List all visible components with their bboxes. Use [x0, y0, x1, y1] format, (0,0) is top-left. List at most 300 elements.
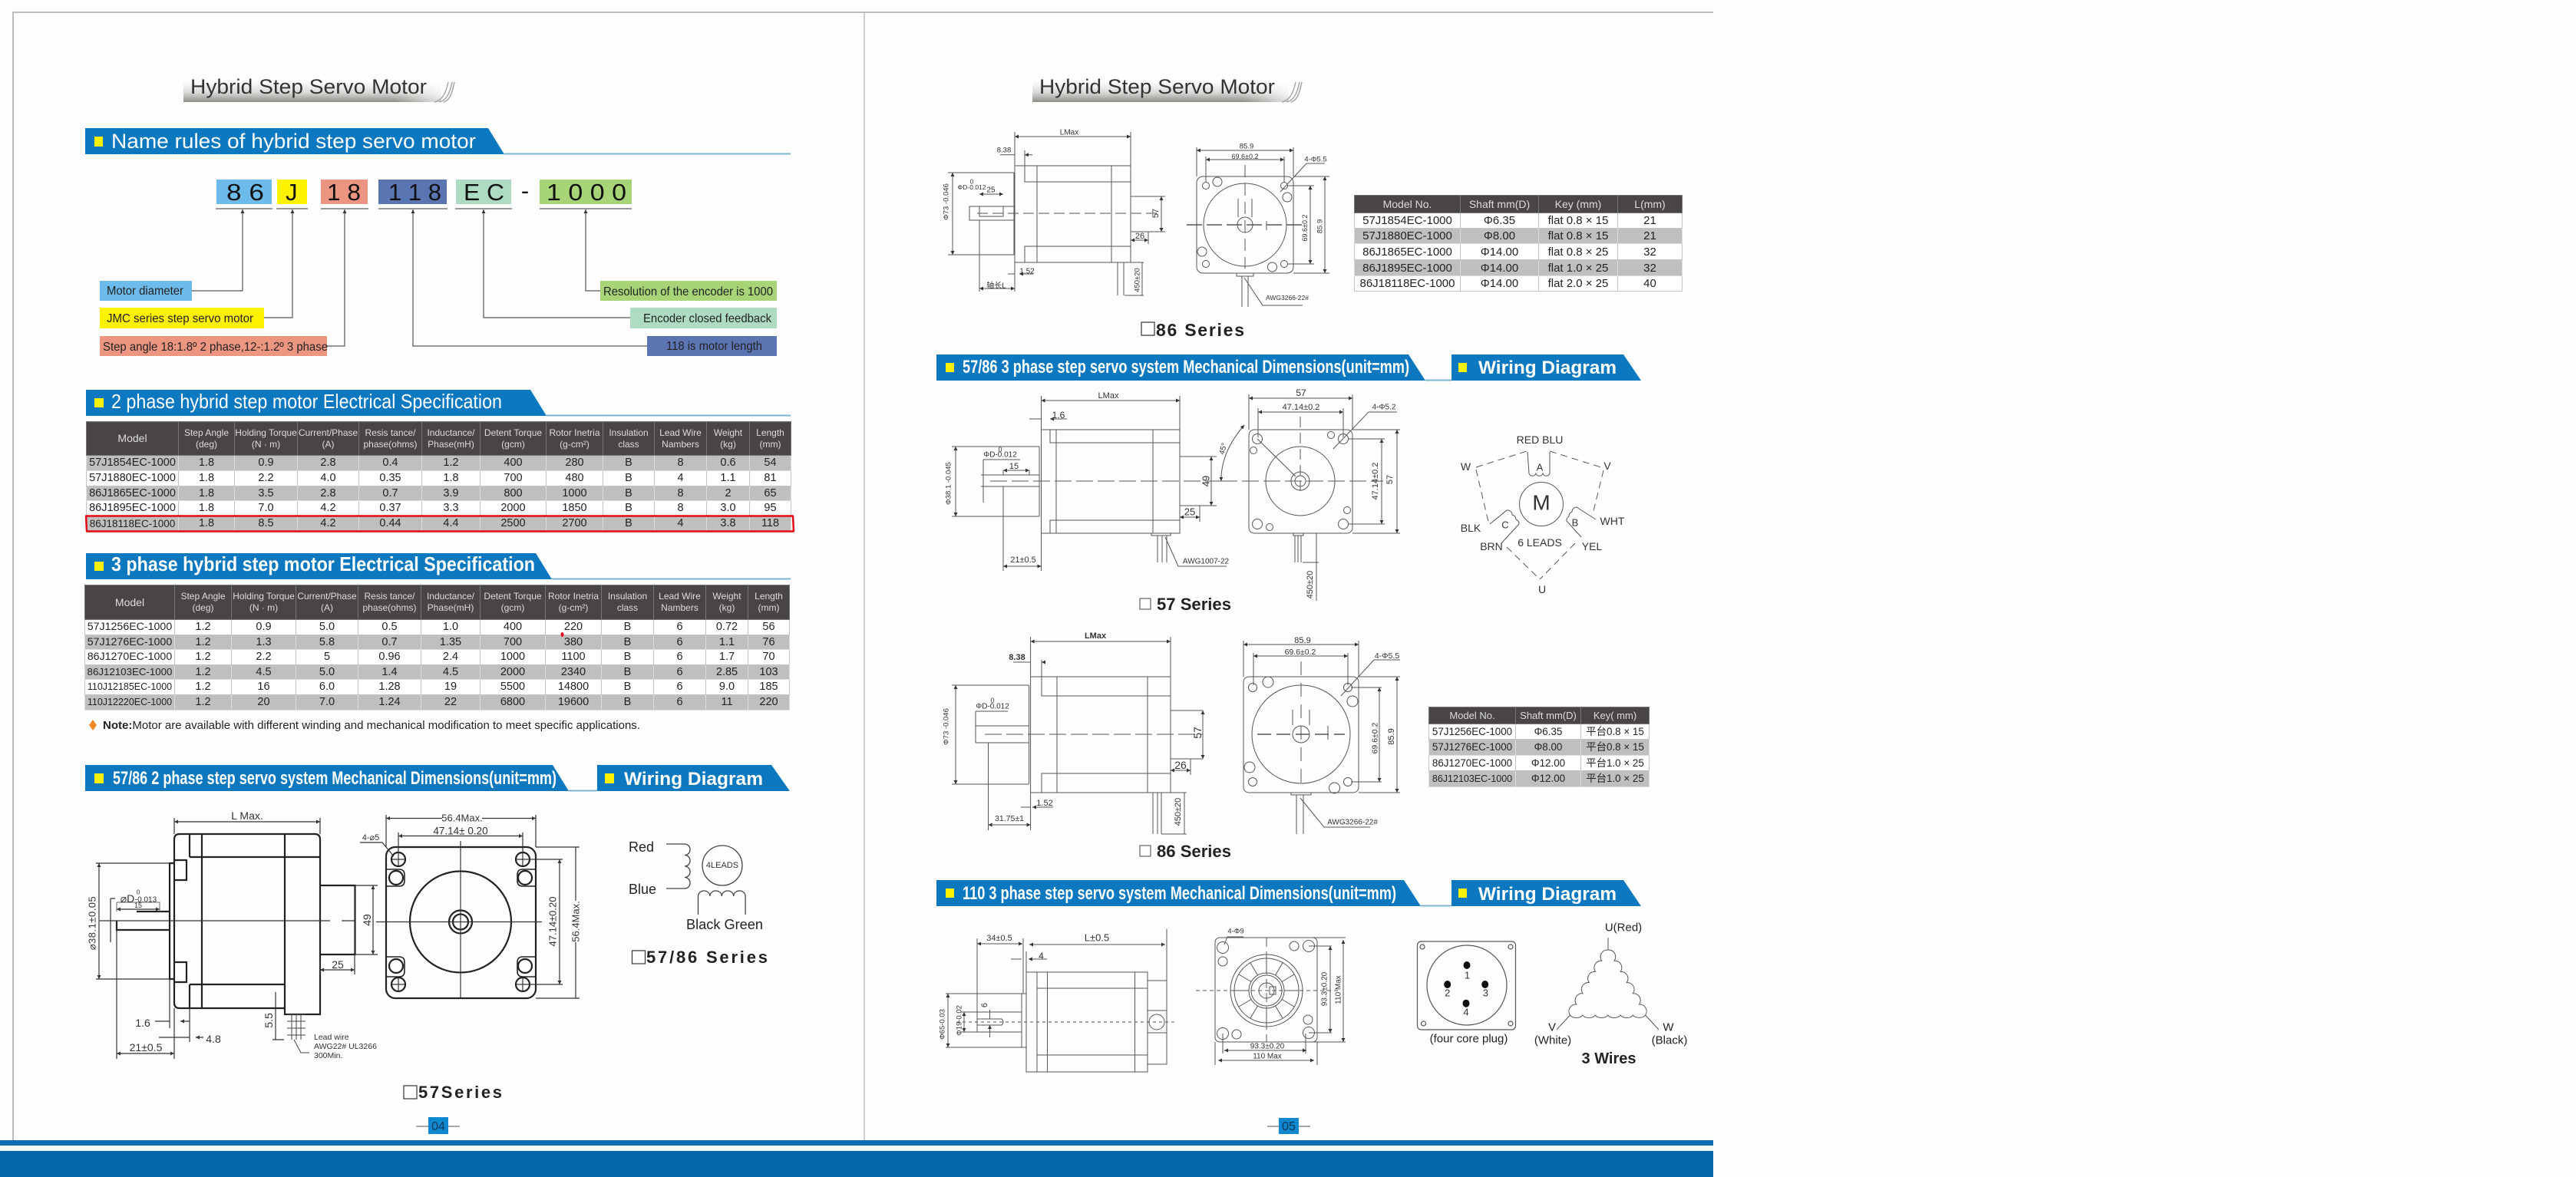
code segment: 18: 1 8: [327, 179, 361, 206]
table: 2 phase electrical specification: (gcm): [501, 439, 525, 450]
table: 2 phase electrical specification: 1850: [562, 502, 587, 514]
drawing: 57 series 3 phase front view: 47.14±0.2: [1371, 463, 1380, 499]
label: step angle: Step angle 18:1.8º 2 phase,12-:1.2º 3 phase: [103, 341, 328, 354]
drawing: 86 series 2 phase side view: ΦD-0.012: [957, 183, 986, 191]
table: 2 phase electrical specification: 86J18118EC-1000: [90, 518, 175, 529]
table: 3 phase electrical specification: class: [617, 602, 638, 613]
table: 2 phase electrical specification: 480: [565, 472, 584, 484]
wiring: 6 leads: U: [1538, 583, 1546, 595]
wiring: 3 wires delta: U(Red): [1605, 921, 1642, 935]
drawing: 57 series 3 phase side view: ΦD-0.012: [983, 451, 1017, 459]
table: 2 phase electrical specification: 65: [764, 487, 777, 499]
table: 86 series shaft dimensions: flat 0.8 × 25: [1548, 246, 1608, 258]
drawing: 57 series side view: L Max.: [231, 809, 263, 822]
drawing: 86 series 3 phase side view: 1.52: [1036, 799, 1053, 808]
table: 2 phase electrical specification: 2500: [500, 517, 526, 529]
table: 2 phase electrical specification: 95: [764, 502, 777, 514]
table: 2 phase electrical specification: 8: [677, 487, 684, 499]
label: resolution of encoder: [600, 281, 777, 301]
page number 04: 04: [431, 1120, 445, 1133]
drawing: 86 series 3 phase side view: 450±20: [1174, 798, 1183, 826]
table: 3 phase electrical specification: Step Angle: [180, 591, 226, 602]
wiring: 6 leads: M: [1532, 491, 1551, 514]
table: 3 phase electrical specification: Nambers: [661, 602, 698, 613]
table: 3 phase electrical specification: Phase(mH): [428, 602, 474, 613]
table: 3 phase electrical specification: Current/Phase: [297, 591, 357, 602]
drawing: 86 series 2 phase side view: 1.52: [1019, 267, 1035, 276]
drawing: 110 series front view: 93.3±0.20: [1320, 971, 1329, 1006]
table: 2 phase electrical specification: 1.8: [199, 472, 214, 484]
drawing: 110 series side view: 34±0.5: [986, 934, 1012, 943]
table: 2 phase electrical specification: 0.4: [382, 457, 398, 469]
table: 2 phase electrical specification: 1.8: [199, 502, 214, 514]
table: 3 phase electrical specification: 57J1256EC-1000: [88, 621, 172, 633]
table: 3 phase electrical specification: 2.2: [256, 651, 272, 663]
table: 2 phase electrical specification: 700: [504, 472, 523, 484]
table: 2 phase electrical specification: Nambers: [662, 439, 699, 450]
label: JMC series: [100, 308, 264, 328]
label: step angle: [100, 336, 328, 356]
table: 3 phase electrical specification: 1.35: [440, 636, 461, 648]
table: 2 phase electrical specification: 4: [677, 472, 684, 484]
table: 2 phase electrical specification: 2.2: [258, 472, 274, 484]
drawing: 57 series side view: [86, 809, 378, 1060]
table: 86 series shaft dimensions: Φ8.00: [1484, 229, 1515, 242]
model code breakdown: [216, 177, 632, 209]
table: 3 phase electrical specification: (deg): [192, 602, 213, 613]
table: 2 phase electrical specification: 2700: [562, 517, 587, 529]
drawing: 86 series 2 phase side view: 26: [1135, 232, 1144, 241]
table: 3 phase electrical specification: 7.0: [319, 696, 335, 708]
table: 3 phase electrical specification: 1.2: [195, 681, 211, 693]
table: 3 phase shaft dimensions: Φ6.35: [1534, 726, 1562, 737]
table: 3 phase electrical specification: (g-cm²): [559, 602, 588, 613]
wiring: 6 leads: C: [1501, 519, 1509, 531]
table: 2 phase electrical specification: 8.5: [258, 517, 274, 529]
drawing: 86 series 2 phase side view: 0: [970, 178, 974, 186]
drawing: 86 series 2 phase front view: 69.6±0.2: [1301, 215, 1309, 241]
table: 3 phase electrical specification: 1.24: [378, 696, 401, 708]
table: 3 phase electrical specification: 0.7: [381, 636, 398, 648]
table: 2 phase electrical specification: 7.0: [258, 502, 274, 514]
table: 3 phase electrical specification: 110J12185EC-1000: [88, 681, 172, 692]
table: 3 phase electrical specification: (N · m): [249, 602, 278, 613]
table: 3 phase electrical specification: 1.0: [443, 621, 458, 633]
drawing: 86 series 3 phase front view: AWG3266-22#: [1327, 818, 1378, 827]
table: 2 phase electrical specification: Rotor Inetria: [549, 427, 600, 437]
table: 86 series shaft dimensions: [1354, 195, 1683, 292]
wiring: 3 wires delta: [1534, 921, 1687, 1067]
connector: four core plug: 4: [1463, 1007, 1469, 1017]
drawing: 86 series 2 phase side view: Φ73 -0.046: [943, 183, 950, 220]
wiring: 4 leads: 4LEADS: [706, 861, 738, 870]
connector: four core plug: 1: [1465, 970, 1470, 981]
table: 3 phase electrical specification: 220: [564, 621, 583, 633]
table: 3 phase electrical specification: B: [624, 666, 631, 678]
table: 86 series shaft dimensions: Shaft mm(D): [1469, 198, 1530, 210]
label: motor length: 118 is motor length: [666, 340, 762, 353]
table: 2 phase electrical specification: 2: [725, 487, 732, 499]
table: 3 phase shaft dimensions: 57J1256EC-1000: [1432, 726, 1512, 737]
table: 2 phase electrical specification: 3.8: [720, 517, 736, 529]
connector: four core plug: [1417, 941, 1515, 1045]
table: 3 phase electrical specification: 57J1276EC-1000: [88, 636, 172, 648]
table: 3 phase shaft dimensions: Φ12.00: [1531, 773, 1565, 784]
drawing: 110 series front view: 110 Max: [1253, 1053, 1282, 1060]
table: 3 phase electrical specification: B: [624, 651, 631, 663]
table: 2 phase electrical specification: B: [625, 487, 632, 499]
table: 86 series shaft dimensions: Model No.: [1383, 198, 1432, 210]
drawing: 57 series 3 phase side view: 1.6: [1052, 410, 1065, 420]
table: 2 phase electrical specification: [86, 421, 791, 532]
table: 2 phase electrical specification: 1.8: [199, 487, 214, 499]
table: 3 phase electrical specification: (A): [321, 602, 333, 613]
table: 3 phase electrical specification: 19: [444, 681, 457, 693]
drawing: 57 series 3 phase front view: 450±20: [1306, 571, 1315, 598]
table: 3 phase electrical specification: 6: [676, 666, 683, 678]
table: 86 series shaft dimensions: flat 2.0 × 25: [1548, 277, 1608, 290]
table: 3 phase shaft dimensions: 57J1276EC-1000: [1432, 741, 1512, 753]
table: 86 series shaft dimensions: 21: [1643, 214, 1656, 227]
table: 3 phase electrical specification: 6: [676, 636, 683, 648]
label: motor length: [647, 336, 777, 356]
drawing: 57 series 3 phase front view: [1218, 387, 1400, 601]
table: 3 phase electrical specification: 2340: [561, 666, 586, 678]
table: 86 series shaft dimensions: 86J1895EC-1000: [1362, 261, 1452, 275]
table: 2 phase electrical specification: 0.37: [379, 502, 401, 514]
drawing: 86 series 2 phase side view: 25: [986, 186, 996, 195]
drawing: 57 series side view: 0: [137, 889, 140, 896]
table: 2 phase electrical specification: 4.2: [320, 502, 336, 514]
table: 3 phase electrical specification: 6.0: [319, 681, 335, 693]
drawing: 57 series 3 phase side view: [944, 391, 1230, 571]
table: 2 phase electrical specification: Holding Torque: [235, 427, 297, 437]
connector: four core plug: 3: [1483, 987, 1488, 999]
heading: 110 3 phase mechanical dimensions: [936, 880, 1451, 906]
drawing: 57 series 3 phase side view: Φ38.1 -0.045: [944, 462, 953, 505]
drawing: 110 series front view: 110 Max: [1334, 975, 1343, 1004]
red mark: [560, 632, 563, 637]
table: 3 phase electrical specification: 5.0: [319, 621, 335, 633]
table: 2 phase electrical specification: 0.9: [258, 457, 274, 469]
table: 3 phase electrical specification: B: [624, 696, 631, 708]
connector: four core plug: 2: [1445, 987, 1450, 999]
table: 3 phase electrical specification: 1.2: [195, 696, 211, 708]
table: 3 phase electrical specification: B: [624, 681, 631, 693]
table: 2 phase electrical specification: 3.3: [443, 502, 459, 514]
table: 86 series shaft dimensions: Key (mm): [1555, 198, 1601, 210]
table: 3 phase electrical specification: 6: [676, 651, 683, 663]
wiring: 4 leads: Red: [629, 839, 654, 855]
drawing: 57 series front view: 56.4Max.: [570, 901, 582, 942]
table: 3 phase electrical specification: 2000: [500, 666, 525, 678]
table: 2 phase electrical specification: 8: [677, 457, 684, 469]
drawing: 57 series front view: 47.14±0.20: [547, 897, 559, 946]
drawing: 86 series 3 phase side view: [943, 631, 1204, 834]
drawing: 57 series side view: Lead wire: [314, 1033, 349, 1042]
table: 3 phase electrical specification: (gcm): [501, 602, 524, 613]
drawing: 86 series 3 phase side view: ΦD-0.012: [976, 703, 1009, 710]
table: 2 phase electrical specification: 81: [764, 472, 777, 484]
table: 86 series shaft dimensions: L(mm): [1634, 198, 1666, 210]
drawing: 86 series 2 phase front view: 69.6±0.2: [1232, 153, 1258, 160]
table: 2 phase electrical specification: B: [625, 502, 632, 514]
page frame lines: [13, 12, 1713, 1177]
wiring: 4 leads: [629, 839, 763, 932]
table: 2 phase electrical specification: 1000: [562, 487, 587, 499]
table: 3 phase electrical specification: 700: [504, 636, 522, 648]
table: 3 phase electrical specification: Holding Torque: [233, 591, 295, 602]
page number 05: [1267, 1118, 1310, 1134]
drawing: 86 series 3 phase front view: 4-Φ5.5: [1375, 651, 1399, 661]
table: 2 phase electrical specification: 280: [565, 457, 584, 469]
table: 3 phase electrical specification: 4.5: [443, 666, 458, 678]
table: 86 series shaft dimensions: flat 0.8 × 15: [1548, 229, 1608, 242]
table: 3 phase electrical specification: Model: [115, 595, 144, 608]
table: 3 phase electrical specification: 11: [721, 696, 733, 708]
drawing: 86 series 3 phase side view: Φ73 -0.046: [943, 708, 950, 745]
drawing: 86 series 2 phase front view: AWG3266-22#: [1266, 294, 1309, 302]
drawing: 110 series side view: L±0.5: [1085, 931, 1109, 944]
heading: 110 3 phase mechanical dimensions: 110 3 phase step servo system Mechanical Dimensions(unit=mm): [963, 883, 1396, 904]
table: 86 series shaft dimensions: 86J1865EC-1000: [1362, 246, 1452, 258]
drawing: 110 series side view: Φ19-0.02: [955, 1005, 964, 1036]
table: 3 phase electrical specification: 5.8: [319, 636, 335, 648]
drawing: 110 series side view: 4: [1039, 951, 1044, 961]
drawing: 57 series 3 phase side view: LMax: [1098, 391, 1119, 401]
table: 2 phase electrical specification: 57J1854EC-1000: [89, 457, 176, 469]
drawing: 57 series front view: 4-⌀5: [362, 833, 379, 842]
heading: wiring diagram left page: Wiring Diagram: [624, 769, 763, 790]
table: 2 phase electrical specification: 2000: [500, 502, 526, 514]
drawing: 86 series 2 phase side view: 轴长L: [986, 281, 1006, 290]
table: 3 phase electrical specification: 70: [762, 651, 775, 663]
table: 3 phase electrical specification: (mm): [758, 602, 779, 613]
table: 2 phase electrical specification: B: [625, 457, 632, 469]
heading: 57/86 3 phase mechanical dimensions: 57/86 3 phase step servo system Mechanical Dimensions(unit=mm): [963, 357, 1409, 377]
table: 3 phase electrical specification: 2.85: [716, 666, 738, 678]
heading: wiring diagram 57/86 3 phase: Wiring Diagram: [1478, 358, 1617, 378]
table: 3 phase electrical specification: 56: [762, 621, 775, 633]
drawing: 57 series 3 phase front view: 47.14±0.2: [1283, 403, 1319, 412]
page number 05: 05: [1282, 1120, 1296, 1133]
table: 2 phase electrical specification: Lead Wire: [659, 427, 702, 437]
table: 2 phase electrical specification: 4.4: [443, 517, 459, 529]
heading: 3 phase specification: [86, 552, 791, 579]
drawing: 86 series 2 phase side view: LMax: [1060, 129, 1078, 137]
drawing: 57 series 3 phase front view: 57: [1385, 475, 1395, 484]
table: 3 phase electrical specification: phase(ohms): [362, 602, 417, 613]
table: 86 series shaft dimensions: 57J1854EC-1000: [1362, 214, 1452, 227]
table: 3 phase shaft dimensions: 平台0.8 × 15: [1586, 726, 1644, 737]
table: 86 series shaft dimensions: 57J1880EC-1000: [1362, 229, 1452, 242]
table: 3 phase electrical specification: 22: [444, 696, 457, 708]
table: 2 phase electrical specification: 1.8: [199, 517, 214, 529]
table: 3 phase shaft dimensions: 平台0.8 × 15: [1586, 741, 1644, 753]
table: 3 phase electrical specification: 103: [759, 666, 778, 678]
table: 3 phase electrical specification: 0.9: [256, 621, 272, 633]
title: left page: Hybrid Step Servo Motor: [190, 75, 427, 98]
table: 2 phase electrical specification: (g-cm²): [560, 439, 590, 450]
series label: 57 Series: 57 Series: [1157, 595, 1231, 614]
drawing: 57 series side view: 1.6: [135, 1017, 150, 1029]
table: 2 phase electrical specification: 0.35: [379, 472, 401, 484]
drawing: 86 series 2 phase side view: 57: [1151, 209, 1161, 218]
table: 3 phase electrical specification: 86J12103EC-1000: [88, 666, 172, 678]
drawing: 57 series side view: 21±0.5: [130, 1041, 163, 1053]
table: 2 phase electrical specification: 800: [504, 487, 523, 499]
drawing: 86 series 3 phase side view: 57: [1191, 727, 1204, 739]
table: 3 phase electrical specification: 1.2: [195, 666, 211, 678]
table: 2 phase electrical specification: class: [618, 439, 639, 450]
heading: wiring diagram 110: Wiring Diagram: [1478, 884, 1617, 905]
code segment: 86: 8 6: [226, 179, 264, 206]
table: 3 phase electrical specification: B: [624, 621, 631, 633]
heading: wiring diagram 57/86 3 phase: [1451, 354, 1641, 381]
table: 3 phase electrical specification: 0.96: [378, 651, 401, 663]
table: 2 phase electrical specification: 1.8: [443, 472, 459, 484]
table: 3 phase electrical specification: 14800: [558, 681, 589, 693]
drawing: 57 series 3 phase side view: 15: [1009, 462, 1019, 471]
table: 3 phase shaft dimensions: Φ8.00: [1534, 741, 1562, 753]
table: 3 phase electrical specification: 86J1270EC-1000: [88, 651, 172, 663]
drawing: 86 series 3 phase side view: 31.75±1: [995, 814, 1024, 823]
table: 86 series shaft dimensions: Φ14.00: [1481, 277, 1518, 290]
wiring: 3 wires delta: V: [1548, 1020, 1556, 1034]
label: motor diameter: [100, 281, 192, 301]
label: resolution of encoder: Resolution of the encoder is 1000: [603, 285, 773, 298]
table: 3 phase electrical specification: 6: [676, 621, 683, 633]
table: 2 phase electrical specification: Model: [117, 432, 147, 444]
table: 2 phase electrical specification: B: [625, 517, 632, 529]
table: 3 phase electrical specification: 110J12220EC-1000: [88, 697, 172, 707]
heading: 57/86 2 phase mechanical dimensions: 57/86 2 phase step servo system Mechanical Dimensions(unit=mm): [113, 768, 556, 789]
table: 3 phase electrical specification: Length: [755, 591, 783, 602]
table: 3 phase shaft dimensions: 平台1.0 × 25: [1586, 757, 1644, 769]
table: 2 phase electrical specification: Resis tance/: [365, 427, 416, 437]
table: 2 phase electrical specification: 1.8: [199, 457, 214, 469]
table: 2 phase electrical specification: 4.0: [320, 472, 336, 484]
table: 3 phase electrical specification: 400: [504, 621, 522, 633]
table: 3 phase electrical specification: Inductance/: [427, 591, 474, 602]
table: 3 phase electrical specification: 380: [564, 636, 583, 648]
drawing: 57 series side view: 49: [361, 914, 373, 926]
table: 2 phase electrical specification: Insulation: [609, 427, 649, 437]
drawing: 86 series 2 phase front view: [1187, 143, 1329, 307]
wiring: 4 leads: Black Green: [686, 917, 763, 932]
wiring: 3 wires delta: (Black): [1652, 1034, 1687, 1047]
drawing: 57 series side view: ⌀38.1±0.05: [86, 896, 98, 950]
table: 86 series shaft dimensions: flat 1.0 × 25: [1548, 261, 1608, 275]
heading: 57/86 3 phase mechanical dimensions: [936, 354, 1451, 381]
drawing: 86 series 2 phase side view: [943, 129, 1165, 295]
drawing: 86 series 2 phase side view: 8.38: [997, 146, 1011, 155]
table: 3 phase electrical specification: 1000: [500, 651, 525, 663]
table: 3 phase electrical specification: 1.1: [719, 636, 735, 648]
series label: 57/86 Series: 57/86 Series: [646, 948, 768, 967]
table: 3 phase shaft dimensions: Model No.: [1449, 710, 1495, 721]
heading: wiring diagram left page: [597, 765, 790, 791]
code segment: 1000: 1 0 0 0: [547, 179, 626, 206]
table: 2 phase electrical specification: Current/Phase: [299, 427, 358, 437]
table: 86 series shaft dimensions: 86J18118EC-1000: [1360, 277, 1455, 290]
wiring: 6 leads: BLK: [1461, 522, 1481, 534]
table: 86 series shaft dimensions: 32: [1643, 246, 1656, 258]
table: 2 phase electrical specification: Weight: [714, 427, 742, 437]
table: 3 phase electrical specification: 9.0: [719, 681, 735, 693]
drawing: 57 series side view: AWG22# UL3266: [314, 1042, 377, 1051]
table: 3 phase electrical specification: 1.2: [195, 651, 211, 663]
drawing: 86 series 2 phase front view: 85.9: [1316, 219, 1325, 233]
drawing: 86 series 2 phase side view: 450±20: [1133, 268, 1142, 292]
label: JMC series: JMC series step servo motor: [107, 312, 254, 325]
table: 2 phase electrical specification: 4: [677, 517, 684, 529]
drawing: 57 series 3 phase front view: 57: [1296, 387, 1306, 398]
table: 3 phase electrical specification: 6: [676, 681, 683, 693]
drawing: 57 series side view: 25: [332, 958, 344, 971]
table: 3 phase electrical specification: 1.3: [256, 636, 272, 648]
table: 3 phase shaft dimensions: [1428, 707, 1650, 787]
table: 3 phase electrical specification: 19600: [558, 696, 589, 708]
table: 3 phase electrical specification: [84, 585, 790, 710]
table: 2 phase electrical specification: 3.0: [720, 502, 736, 514]
table: 86 series shaft dimensions: 32: [1643, 261, 1656, 275]
page number 04: [416, 1117, 460, 1134]
table: 3 phase electrical specification: 1.4: [381, 666, 398, 678]
table: 3 phase electrical specification: Detent Torque: [484, 591, 542, 602]
table: 2 phase electrical specification: 400: [504, 457, 523, 469]
heading: 3 phase specification: 3 phase hybrid step motor Electrical Specification: [111, 552, 535, 575]
drawing: 110 series front view: 93.3±0.20: [1250, 1042, 1285, 1051]
table: 2 phase electrical specification: (mm): [760, 439, 781, 450]
label: encoder closed feedback: Encoder closed feedback: [643, 312, 772, 325]
table: 2 phase electrical specification: 3.9: [443, 487, 459, 499]
table: 2 phase electrical specification: (N · m): [252, 439, 280, 450]
table: 3 phase electrical specification: 4.5: [256, 666, 272, 678]
drawing: 110 series side view: [938, 929, 1175, 1072]
table: 2 phase electrical specification: phase(ohms): [363, 439, 418, 450]
leader arrows: [192, 209, 647, 346]
table: 3 phase electrical specification: 76: [762, 636, 775, 648]
table: 3 phase electrical specification: 185: [759, 681, 778, 693]
wiring: 6 leads: [1461, 434, 1625, 595]
series label: 86 Series lower: 86 Series: [1157, 842, 1231, 861]
table: 2 phase electrical specification: 3.5: [258, 487, 274, 499]
heading: 2 phase specification: 2 phase hybrid step motor Electrical Specification: [111, 390, 502, 413]
drawing: 110 series side view: 6: [980, 1003, 989, 1007]
wiring: 3 wires delta: 3 Wires: [1582, 1050, 1636, 1067]
drawing: 110 series front view: 4-Φ9: [1227, 927, 1244, 936]
table: 3 phase electrical specification: Rotor Inetria: [548, 591, 599, 602]
table: 2 phase electrical specification: Step Angle: [184, 427, 229, 437]
table: 3 phase electrical specification: 0.72: [716, 621, 738, 633]
wiring: 3 wires delta: (White): [1534, 1034, 1571, 1047]
table: 2 phase electrical specification: 54: [764, 457, 777, 469]
code hyphen: -: [521, 177, 529, 204]
code segment: 118: 1 1 8: [388, 179, 441, 206]
table: 3 phase shaft dimensions: Φ12.00: [1531, 757, 1565, 769]
table: 2 phase electrical specification: 0.7: [382, 487, 398, 499]
drawing: 57 series side view: 4.8: [206, 1033, 221, 1045]
table: 3 phase electrical specification: Resis tance/: [364, 591, 415, 602]
table: 3 phase electrical specification: 5.0: [319, 666, 335, 678]
label: motor diameter: Motor diameter: [107, 285, 184, 298]
drawing: 57 series 3 phase front view: 4-Φ5.2: [1372, 404, 1396, 411]
table: 3 phase electrical specification: 1100: [561, 651, 586, 663]
drawing: 86 series 3 phase front view: 85.9: [1387, 728, 1396, 745]
table: 2 phase electrical specification: 2.8: [320, 457, 336, 469]
drawing: 86 series 3 phase front view: 69.6±0.2: [1285, 648, 1316, 657]
